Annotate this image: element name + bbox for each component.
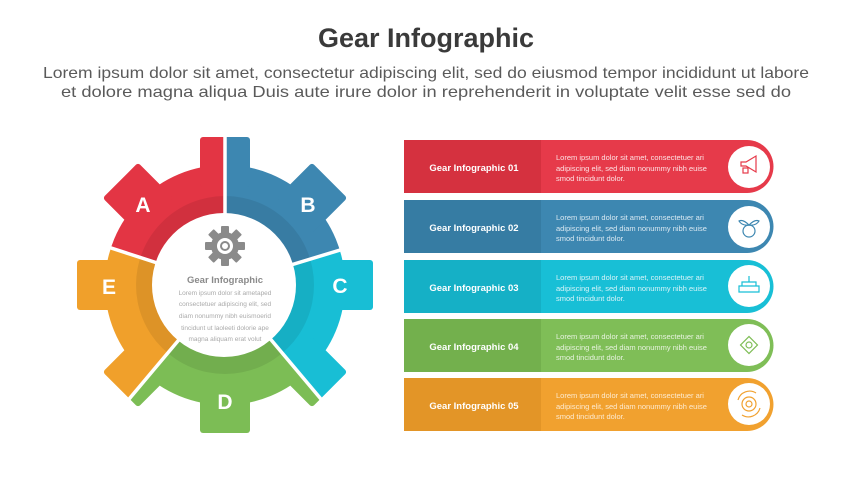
center text: Lorem ipsum dolor sit ametaped [179,290,272,297]
panel: item 04 [404,319,774,372]
panel: item 05 [404,378,773,431]
panel: item 03: smod tincidunt dolor. [556,294,625,303]
segment D [130,340,320,433]
panel: item 05: Gear Infographic 05 [429,401,519,412]
subtitle: et dolore magna aliqua Duis aute irure dolor in reprehenderit in voluptate velit esse sed do [61,84,791,101]
center text: Gear Infographic [187,275,263,286]
panel: item 01: smod tincidunt dolor. [556,174,625,183]
panel: item 03: adipiscing elit, sed diam nonummy nibh euise [556,284,707,293]
center text: diam nonummy nibh euismoerid [179,313,271,320]
segment C [272,252,373,398]
panel: item 04: Gear Infographic 04 [429,342,519,353]
panel: item 01: Gear Infographic 01 [429,163,519,174]
panel: item 02: Lorem ipsum dolor sit amet, consectetuer ari [556,213,704,222]
panel: item 01: Lorem ipsum dolor sit amet, consectetuer ari [556,153,704,162]
panel: item 02: smod tincidunt dolor. [556,234,625,243]
center circle [152,213,296,357]
letters: D [217,391,233,414]
panel: item 01: adipiscing elit, sed diam nonummy nibh euise [556,164,707,173]
letters: C [332,275,348,298]
panel: item 05: adipiscing elit, sed diam nonummy nibh euise [556,402,707,411]
segment E [77,250,177,398]
letters: A [135,194,151,217]
panel: item 02 [404,200,774,253]
title: Gear Infographic [318,23,534,53]
center text [179,275,272,343]
panel: item 05: Lorem ipsum dolor sit amet, consectetuer ari [556,391,704,400]
panel: item 05: smod tincidunt dolor. [556,412,625,421]
subtitle: Lorem ipsum dolor sit amet, consectetur adipiscing elit, sed do eiusmod tempor incididunt ut labore [43,65,809,82]
panel: item 04: smod tincidunt dolor. [556,353,625,362]
panel: item 03 [404,260,774,313]
gear chart [77,137,373,433]
center text: magna aliquam erat volut [188,336,262,343]
segment A [104,137,224,261]
center text: consectetuer adipiscing elit, sed [179,301,271,308]
subtitle [43,65,809,101]
letters: B [300,194,316,217]
panel: item 02: adipiscing elit, sed diam nonummy nibh euise [556,224,707,233]
center text: tincidunt ut laoleeti dolorie ape [181,325,269,332]
panel: item 03: Gear Infographic 03 [429,283,519,294]
letters [102,194,348,414]
letters: E [102,276,116,299]
panel: item 04: Lorem ipsum dolor sit amet, consectetuer ari [556,332,704,341]
icon: center gear [205,226,245,266]
panel: item 01 [404,140,774,193]
panel: item 03: Lorem ipsum dolor sit amet, consectetuer ari [556,273,704,282]
panel: item 04: adipiscing elit, sed diam nonummy nibh euise [556,343,707,352]
panel: item 02: Gear Infographic 02 [429,223,519,234]
segment B [226,137,346,263]
